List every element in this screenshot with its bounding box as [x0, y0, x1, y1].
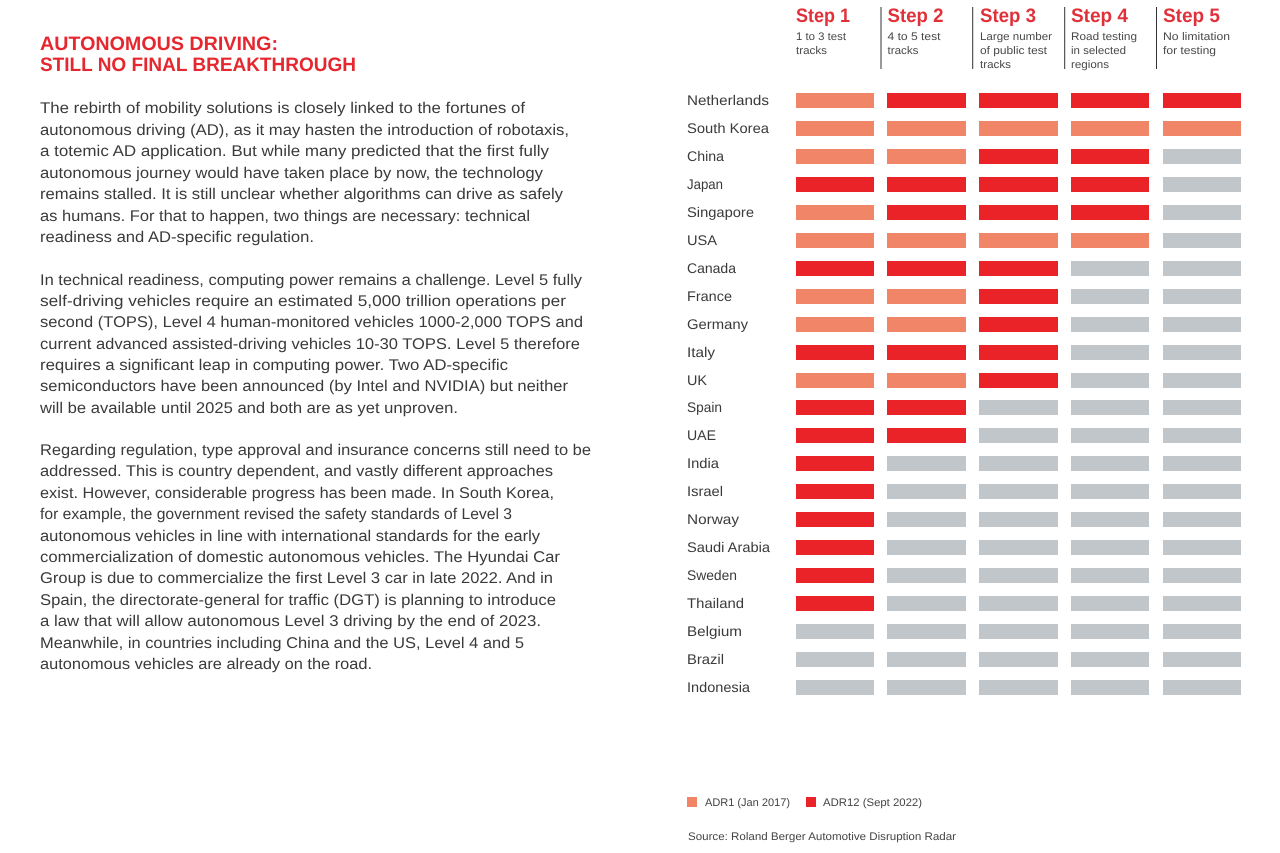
step 1 heading: Step 1	[796, 5, 850, 27]
row: France: France	[687, 288, 732, 304]
text block: introduction: as humans. For that to happen, two things are necessary: technical	[40, 208, 530, 225]
step 3 heading: of public test	[980, 45, 1047, 57]
step 4 heading: regions	[1071, 59, 1110, 71]
row: Thailand	[687, 595, 1241, 611]
row: Brazil	[687, 651, 1241, 667]
row: Sweden	[687, 567, 1241, 583]
row: UK	[687, 372, 1241, 388]
step 2 heading: 4 to 5 test	[888, 31, 940, 43]
step 4 heading: Step 4	[1071, 5, 1128, 27]
row: UK: UK	[687, 372, 708, 388]
row: Spain: Spain	[687, 399, 722, 415]
text block: technical readiness: second (TOPS), Level 4 human-monitored vehicles 1000-2,000 TOPS and	[40, 314, 583, 331]
chart header: steps	[796, 5, 1230, 71]
step 5 heading: No limitation	[1163, 31, 1230, 43]
text block: technical readiness: semiconductors have been announced (by Intel and NVIDIA) but neither	[40, 378, 568, 395]
row: Thailand: Thailand	[687, 595, 744, 611]
step 5 heading	[1163, 5, 1230, 57]
text block: introduction	[40, 100, 569, 246]
row: Germany	[687, 316, 1241, 332]
row: Canada: Canada	[687, 260, 736, 276]
row: Singapore: Singapore	[687, 204, 754, 220]
text block: introduction: a totemic AD application. But while many predicted that the first fully	[40, 143, 549, 160]
text block: regulation: autonomous vehicles in line with international standards for the early	[40, 528, 540, 545]
row: South Korea: South Korea	[687, 120, 769, 136]
row: Indonesia	[687, 679, 1241, 695]
row: Israel	[687, 483, 1241, 499]
step 3 heading: Step 3	[980, 5, 1036, 27]
row: India: India	[687, 455, 719, 471]
step 4 heading: in selected	[1071, 45, 1126, 57]
text block: technical readiness: requires a significant leap in computing power. Two AD-specific	[40, 357, 508, 374]
legend: ADR1 (Jan 2017)	[705, 797, 790, 809]
text block: technical readiness: self-driving vehicles require an estimated 5,000 trillion operations per	[40, 293, 566, 310]
text block: regulation: commercialization of domestic autonomous vehicles. The Hyundai Car	[40, 549, 560, 566]
legend: ADR12 (Sept 2022)	[823, 797, 922, 809]
text block: introduction: The rebirth of mobility solutions is closely linked to the fortunes of	[40, 100, 526, 117]
row: Japan	[687, 176, 1241, 192]
row: Canada	[687, 260, 1241, 276]
title: STILL NO FINAL BREAKTHROUGH	[40, 54, 356, 76]
row: Italy: Italy	[687, 344, 715, 360]
row: Netherlands	[687, 92, 1241, 108]
step 4 heading	[1071, 5, 1137, 71]
row: USA	[687, 232, 1241, 248]
row: Norway	[687, 511, 1241, 527]
step 5 heading: Step 5	[1163, 5, 1220, 27]
row: Italy	[687, 344, 1241, 360]
text block: technical readiness: will be available until 2025 and both are as yet unproven.	[39, 400, 458, 417]
step 2 heading	[888, 5, 944, 57]
row: France	[687, 288, 1241, 304]
text block: technical readiness: In technical readiness, computing power remains a challenge. Level 5 fully	[40, 272, 582, 289]
text block: regulation: Meanwhile, in countries including China and the US, Level 4 and 5	[40, 635, 524, 652]
legend	[687, 797, 922, 809]
row: Brazil: Brazil	[687, 651, 724, 667]
title: AUTONOMOUS DRIVING:	[40, 33, 278, 55]
text block: introduction: autonomous journey would have taken place by now, the technology	[40, 165, 543, 182]
row: Belgium	[687, 623, 1241, 639]
row: UAE	[687, 427, 1241, 443]
step 1 heading: tracks	[796, 45, 828, 57]
step 3 heading: Large number	[980, 31, 1052, 43]
row: Japan: Japan	[687, 176, 723, 192]
step 3 heading	[980, 5, 1052, 71]
row: Spain	[687, 399, 1241, 415]
text block: regulation: Regarding regulation, type approval and insurance concerns still need to be	[40, 442, 591, 459]
row: Sweden: Sweden	[687, 567, 737, 583]
text block: regulation: exist. However, considerable progress has been made. In South Korea,	[40, 485, 554, 502]
source note: Source: Roland Berger Automotive Disruption Radar	[688, 831, 956, 843]
text block: technical readiness	[39, 272, 583, 417]
text block: regulation: Group is due to commercialize the first Level 3 car in late 2022. And in	[40, 570, 553, 587]
row: China: China	[687, 148, 724, 164]
row: Indonesia: Indonesia	[687, 679, 750, 695]
row: USA: USA	[687, 232, 718, 248]
text block: regulation: a law that will allow autonomous Level 3 driving by the end of 2023.	[40, 613, 541, 630]
step 2 heading: tracks	[888, 45, 919, 57]
step 4 heading: Road testing	[1071, 31, 1137, 43]
row: Saudi Arabia: Saudi Arabia	[687, 539, 770, 555]
text block: introduction: readiness and AD-specific regulation.	[40, 229, 314, 246]
text block: technical readiness: current advanced assisted-driving vehicles 10-30 TOPS. Level 5 therefore	[40, 336, 580, 353]
text block: regulation: Spain, the directorate-general for traffic (DGT) is planning to introduce	[40, 592, 556, 609]
row: Saudi Arabia	[687, 539, 1241, 555]
row: Belgium: Belgium	[687, 623, 742, 639]
step 2 heading: Step 2	[888, 5, 944, 27]
text block: regulation: for example, the government revised the safety standards of Level 3	[40, 506, 512, 523]
step 5 heading: for testing	[1163, 45, 1216, 57]
row: UAE: UAE	[687, 427, 716, 443]
text block: regulation	[40, 442, 591, 673]
step 3 heading: tracks	[980, 59, 1012, 71]
row: India	[687, 455, 1241, 471]
row: Norway: Norway	[687, 511, 739, 527]
text block: introduction: autonomous driving (AD), as it may hasten the introduction of robotaxis,	[40, 122, 569, 139]
step 1 heading: 1 to 3 test	[796, 31, 846, 43]
text block: introduction: remains stalled. It is still unclear whether algorithms can drive as safely	[40, 186, 563, 203]
row: Singapore	[687, 204, 1241, 220]
row: South Korea	[687, 120, 1241, 136]
text block: regulation: autonomous vehicles are already on the road.	[40, 656, 372, 673]
row: Israel: Israel	[687, 483, 723, 499]
row: China	[687, 148, 1241, 164]
text block: regulation: addressed. This is country dependent, and vastly different approaches	[40, 463, 553, 480]
row: Germany: Germany	[687, 316, 748, 332]
chart: country readiness grid	[687, 92, 1241, 695]
title	[40, 33, 356, 76]
step 1 heading	[796, 5, 850, 57]
row: Netherlands: Netherlands	[687, 92, 769, 108]
